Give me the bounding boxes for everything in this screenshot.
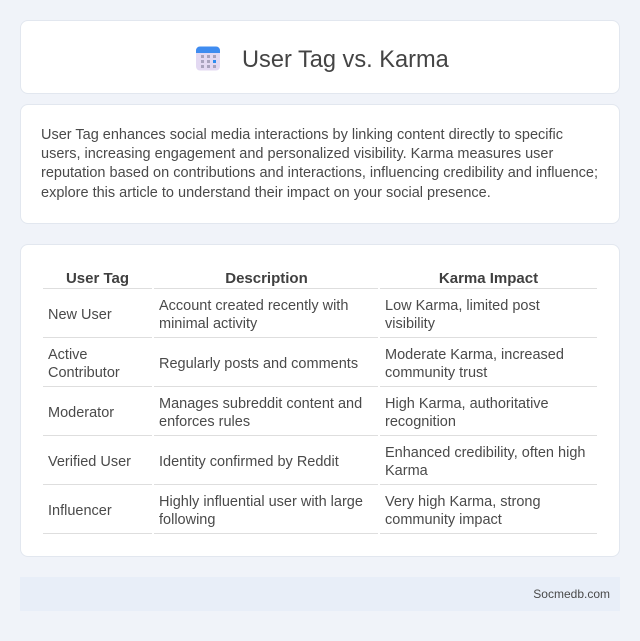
row: Verified User: Enhanced credibility, often high	[385, 445, 585, 461]
panel: table card	[20, 244, 620, 557]
row: Influencer: following	[159, 512, 215, 528]
row: Verified User: Identity confirmed by Reddit	[159, 454, 339, 470]
text block: intro paragraph: User Tag enhances social media interactions by linking content directly to specific	[41, 127, 563, 143]
row: Moderator	[48, 396, 549, 430]
title: User Tag vs. Karma	[242, 47, 449, 73]
row: New User	[48, 298, 540, 332]
row: New User: Account created recently with	[159, 298, 348, 314]
row: Active Contributor: Moderate Karma, increased	[385, 347, 564, 363]
row: Influencer	[48, 494, 541, 528]
row: Moderator: Moderator	[48, 405, 114, 421]
table header: Description: Description	[225, 270, 308, 287]
row: Verified User: Karma	[385, 463, 428, 479]
row: Influencer: Influencer	[48, 503, 112, 519]
row: Influencer: community impact	[385, 512, 502, 528]
row: Active Contributor: Regularly posts and comments	[159, 356, 358, 372]
row: New User: minimal activity	[159, 316, 257, 332]
footer	[20, 577, 620, 611]
text block: intro paragraph: reputation based on contributions and interactions, influencing credibility and influence;	[41, 165, 598, 181]
table header: User Tag: User Tag	[66, 270, 129, 287]
icon: calendar	[196, 46, 220, 70]
row: Moderator: Manages subreddit content and	[159, 396, 362, 412]
text block: intro paragraph: explore this article to understand their impact on your social presence.	[41, 185, 491, 201]
row: Moderator: recognition	[385, 414, 456, 430]
row: Active Contributor: community trust	[385, 365, 487, 381]
row: Active Contributor: Contributor	[48, 365, 120, 381]
row: New User: visibility	[385, 316, 435, 332]
row: Influencer: Highly influential user with large	[159, 494, 363, 510]
footer text: Socmedb.com	[533, 587, 610, 601]
row: Moderator: enforces rules	[159, 414, 250, 430]
text block: intro paragraph	[41, 127, 598, 201]
table header: Karma Impact: Karma Impact	[439, 270, 538, 287]
panel: title card	[20, 20, 620, 94]
text block: intro paragraph: users, increasing engagement and personalized visibility. Karma measures user	[41, 146, 553, 162]
row: Verified User	[48, 445, 585, 479]
panel: intro	[20, 104, 620, 224]
row: New User: Low Karma, limited post	[385, 298, 540, 314]
row: Moderator: High Karma, authoritative	[385, 396, 549, 412]
row: New User: New User	[48, 307, 112, 323]
row: Active Contributor	[48, 347, 564, 381]
row: Verified User: Verified User	[48, 454, 131, 470]
row: Active Contributor: Active	[48, 347, 88, 363]
row: Influencer: Very high Karma, strong	[385, 494, 541, 510]
